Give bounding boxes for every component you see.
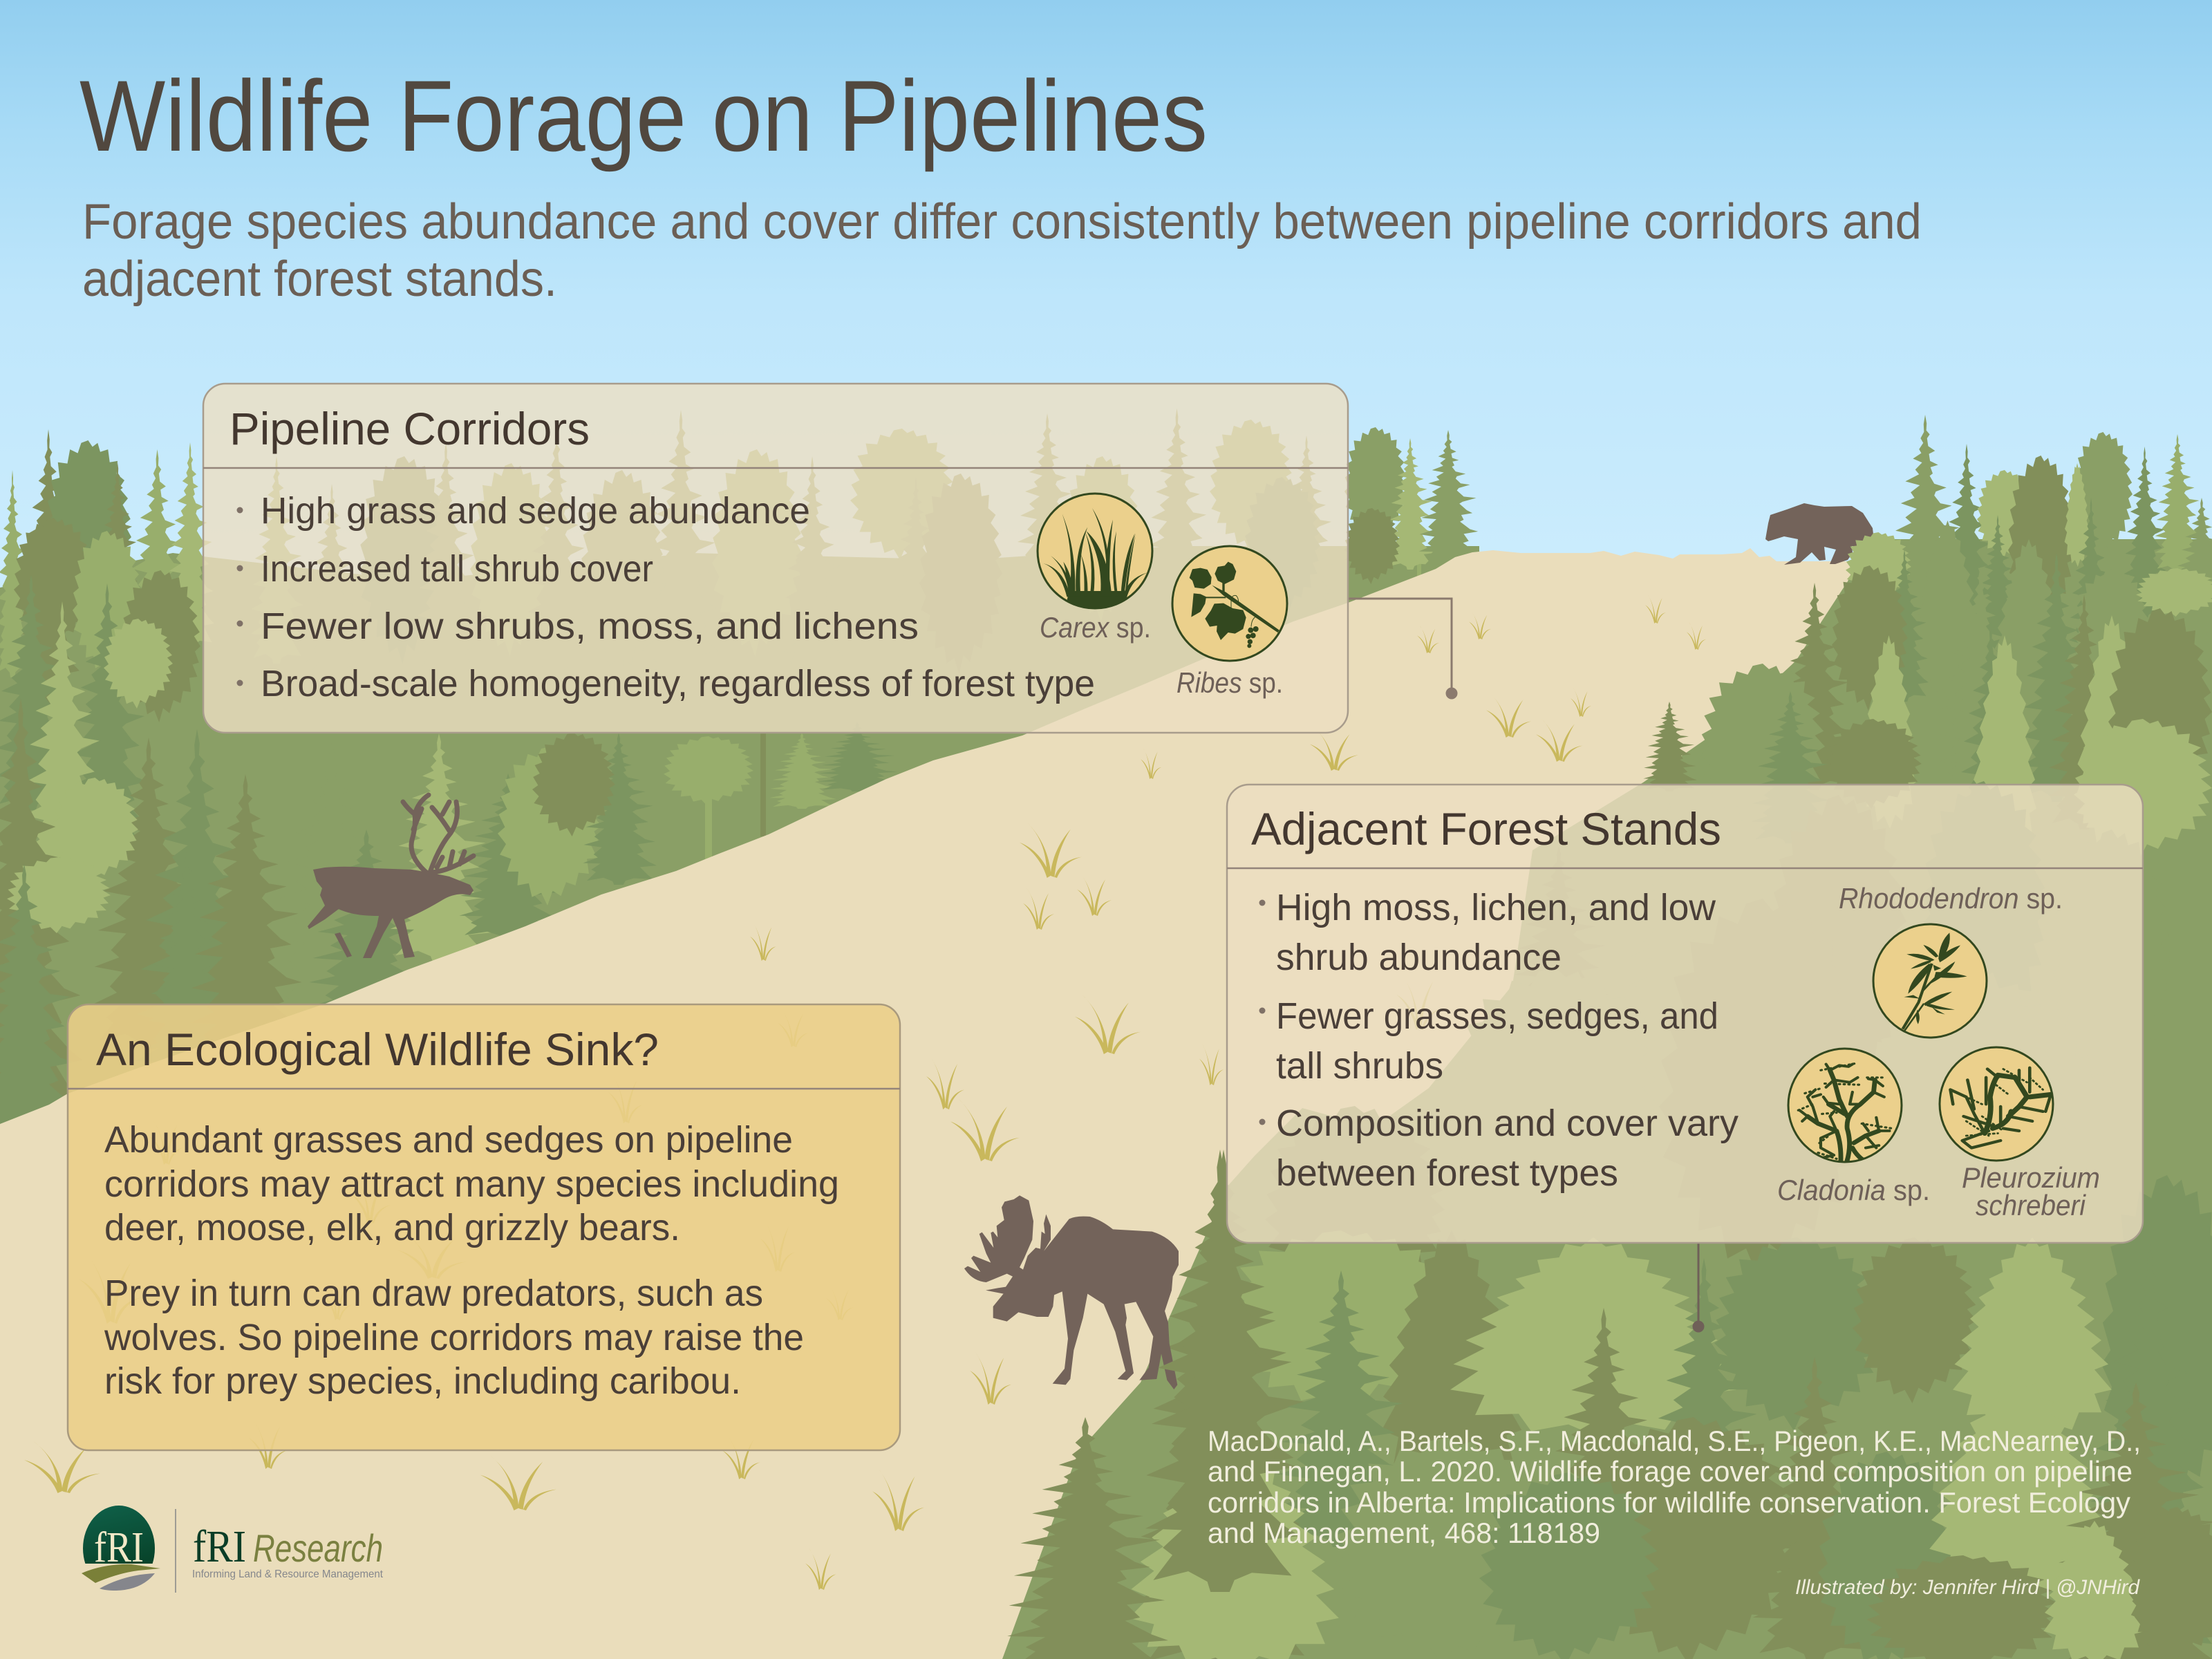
citation: corridors in Alberta: Implications for wildlife conservation. Forest Ecology (1208, 1486, 2130, 1519)
bullet list: Fewer low shrubs, moss, and lichens (261, 606, 919, 647)
right forest (1002, 415, 2212, 1659)
subtitle: Forage species abundance and cover differ consistently between pipeline corridors and (82, 194, 1922, 250)
panel: adjacent forest stands (1227, 785, 2143, 1243)
bullet list: High grass and sedge abundance (261, 490, 810, 532)
title: Wildlife Forage on Pipelines (79, 59, 1208, 172)
icon: pleurozium (1940, 1047, 2053, 1161)
connector: forest callout (1694, 1243, 1703, 1331)
bullet list (236, 490, 1095, 704)
heading: Pipeline Corridors (229, 403, 590, 454)
logo emblem (82, 1506, 160, 1591)
connector: corridor callout (1348, 599, 1456, 698)
logo wordmark: fRI (193, 1521, 246, 1572)
logo emblem: fRI (94, 1524, 144, 1571)
paragraph 2 (104, 1273, 804, 1402)
citation: and Management, 468: 118189 (1208, 1517, 1600, 1549)
paragraph 1: Abundant grasses and sedges on pipeline (104, 1119, 793, 1161)
icon: rhododendron (1873, 924, 1987, 1038)
illustrator credit: Illustrated by: Jennifer Hird | @JNHird (1795, 1576, 2140, 1599)
paragraph 1: corridors may attract many species including (104, 1163, 839, 1205)
label: carex: Carex sp. (1040, 611, 1151, 644)
icon: caribou (308, 795, 474, 958)
label: pleurozium schreberi: schreberi (1976, 1189, 2087, 1221)
citation: and Finnegan, L. 2020. Wildlife forage cover and composition on pipeline (1208, 1455, 2133, 1488)
bullet list: between forest types (1276, 1152, 1618, 1194)
paragraph 2: wolves. So pipeline corridors may raise the (104, 1317, 804, 1358)
heading: Adjacent Forest Stands (1251, 803, 1721, 854)
label: pleurozium schreberi (1962, 1161, 2100, 1221)
paragraph 2: Prey in turn can draw predators, such as (104, 1273, 763, 1314)
panel: an ecological wildlife sink (68, 1004, 900, 1450)
icon: ribes (1172, 546, 1287, 661)
icon: bear (1765, 503, 1875, 565)
paragraph 1 (104, 1119, 839, 1248)
paragraph 1: deer, moose, elk, and grizzly bears. (104, 1207, 680, 1248)
panel: pipeline corridors (203, 384, 1348, 733)
icon: cladonia (1788, 1049, 1902, 1165)
citation: MacDonald, A., Bartels, S.F., Macdonald, S.E., Pigeon, K.E., MacNearney, D., (1208, 1425, 2141, 1457)
label: ribes: Ribes sp. (1177, 666, 1283, 699)
subtitle (82, 194, 1922, 307)
bullet list: Broad-scale homogeneity, regardless of forest type (261, 663, 1095, 704)
bullet list: tall shrubs (1276, 1045, 1443, 1087)
logo wordmark: Informing Land & Resource Management (192, 1568, 384, 1580)
logo: fRI Research (82, 1506, 384, 1593)
citation (1208, 1425, 2141, 1549)
paragraph 2: risk for prey species, including caribou. (104, 1360, 741, 1402)
bullet list: Composition and cover vary (1276, 1103, 1738, 1144)
bullet list: Fewer grasses, sedges, and (1276, 995, 1718, 1037)
icon: carex (1038, 494, 1152, 610)
bullet list (1259, 887, 1738, 1194)
bullet list: Increased tall shrub cover (261, 548, 653, 590)
bullet list: shrub abundance (1276, 937, 1562, 978)
pipeline corridor ground (0, 548, 2212, 1659)
left forest (0, 409, 1479, 1175)
label: pleurozium schreberi: Pleurozium (1962, 1161, 2100, 1194)
label: cladonia: Cladonia sp. (1777, 1174, 1930, 1206)
bullet list: High moss, lichen, and low (1276, 887, 1716, 928)
grass tufts (24, 594, 1706, 1590)
icon: moose (964, 1195, 1179, 1389)
label: rhododendron: Rhododendron sp. (1839, 882, 2063, 915)
logo wordmark: Research (253, 1526, 383, 1570)
subtitle: adjacent forest stands. (82, 252, 557, 307)
foreground spruce over moose (1145, 1150, 1300, 1592)
heading: An Ecological Wildlife Sink? (96, 1024, 659, 1075)
logo wordmark (192, 1521, 384, 1580)
